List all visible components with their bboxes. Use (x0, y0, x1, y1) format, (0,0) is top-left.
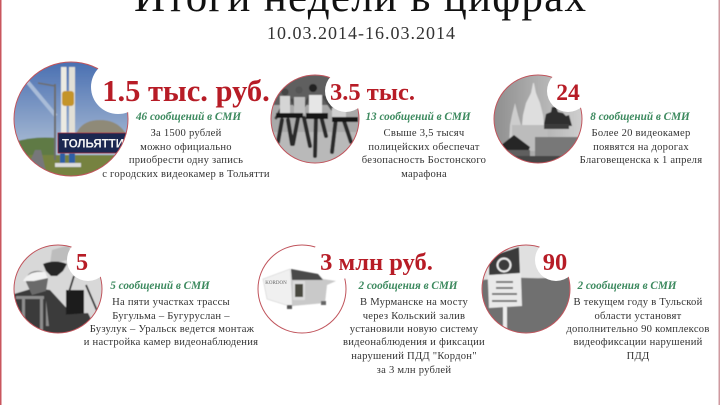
description: дополнительно 90 комплексов (566, 324, 710, 335)
description: области установят (594, 311, 682, 322)
description: безопасность Бостонского (362, 155, 486, 166)
description: видеофиксации нарушений (573, 337, 703, 348)
description: Бузулук – Уральск ведется монтаж (90, 324, 255, 335)
big number: 3.5 тыс. (330, 79, 415, 106)
panel: Murmansk Kordon (258, 238, 485, 376)
panel: Blagoveshchensk (490, 70, 702, 166)
description: за 3 млн рублей (377, 365, 451, 376)
description: Свыше 3,5 тысяч (384, 128, 465, 139)
description: появятся на дорогах (593, 142, 689, 153)
description: В Мурманске на мосту (360, 297, 468, 308)
media mentions: 2 сообщения в СМИ (357, 280, 458, 292)
big number: 90 (543, 249, 567, 276)
description: нарушений ПДД "Кордон" (351, 351, 477, 362)
description: Бугульма – Бугуруслан – (112, 311, 230, 322)
big number: 5 (76, 249, 88, 276)
description: ПДД (627, 351, 649, 362)
big number: 3 млн руб. (320, 249, 433, 276)
right border (718, 0, 720, 405)
media mentions: 5 сообщений в СМИ (110, 280, 210, 292)
photo: Tolyatti city sign: ТОЛЬЯТТИ (62, 136, 124, 150)
photo: camera installation (14, 244, 102, 334)
left border (0, 0, 2, 405)
description: можно официально (140, 142, 232, 153)
photo: Tolyatti city sign (14, 62, 128, 176)
media mentions: 46 сообщений в СМИ (135, 111, 241, 123)
panel: Tolyatti (14, 60, 270, 180)
photo: Kordon camera unit: KORDON (265, 281, 287, 286)
media mentions: 8 сообщений в СМИ (590, 111, 690, 123)
photo: road camera warning sign (482, 244, 570, 334)
description: марафона (401, 169, 447, 180)
description: приобрести одну запись (129, 155, 243, 166)
media mentions: 2 сообщения в СМИ (576, 280, 677, 292)
photo: marathon runners (270, 74, 360, 164)
big number: 24 (556, 80, 580, 106)
description: полицейских обеспечат (368, 142, 480, 153)
panel: Bugulma highway (14, 239, 258, 348)
description: и настройка камер видеонаблюдения (84, 337, 258, 348)
description: через Кольский залив (363, 311, 465, 322)
description: В текущем году в Тульской (573, 297, 703, 308)
date range: 10.03.2014-16.03.2014 (267, 23, 455, 43)
description: установили новую систему (350, 324, 479, 335)
description: с городских видеокамер в Тольятти (102, 169, 270, 180)
photo: cathedral and monument (494, 74, 582, 164)
panel: Tula region (482, 239, 710, 362)
description: На пяти участках трассы (112, 297, 230, 308)
description: Благовещенска к 1 апреля (580, 155, 702, 166)
media mentions: 13 сообщений в СМИ (365, 111, 471, 123)
photo: Kordon camera unit (258, 238, 355, 333)
panel: Boston marathon (270, 70, 486, 180)
big number: 1.5 тыс. руб. (102, 74, 270, 108)
description: Более 20 видеокамер (591, 128, 691, 139)
description: За 1500 рублей (150, 128, 222, 139)
description: видеонаблюдения и фиксации (343, 337, 485, 348)
